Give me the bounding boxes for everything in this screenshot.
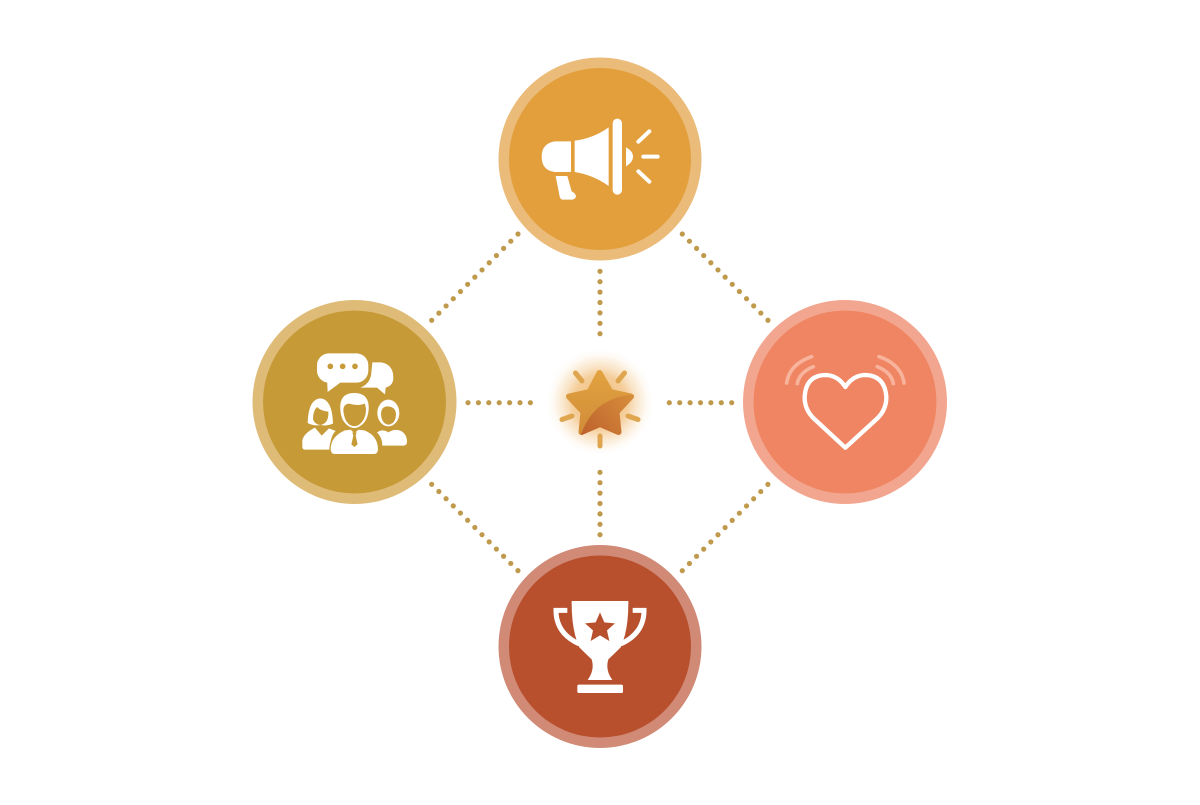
node: people talking — [252, 300, 456, 504]
star rays — [562, 373, 638, 446]
central star — [552, 354, 648, 450]
icon: megaphone — [542, 119, 658, 200]
glow — [545, 347, 655, 457]
icon: trophy with star — [556, 601, 644, 693]
dotted connectors — [432, 234, 768, 571]
node: trophy — [498, 545, 702, 748]
node: heart — [743, 300, 947, 504]
icon: vibrating heart — [787, 357, 904, 448]
star — [566, 370, 634, 435]
node: megaphone — [498, 58, 702, 260]
diagram: star hub with four icon nodes — [252, 58, 947, 748]
icon: group with speech bubbles — [302, 353, 407, 455]
